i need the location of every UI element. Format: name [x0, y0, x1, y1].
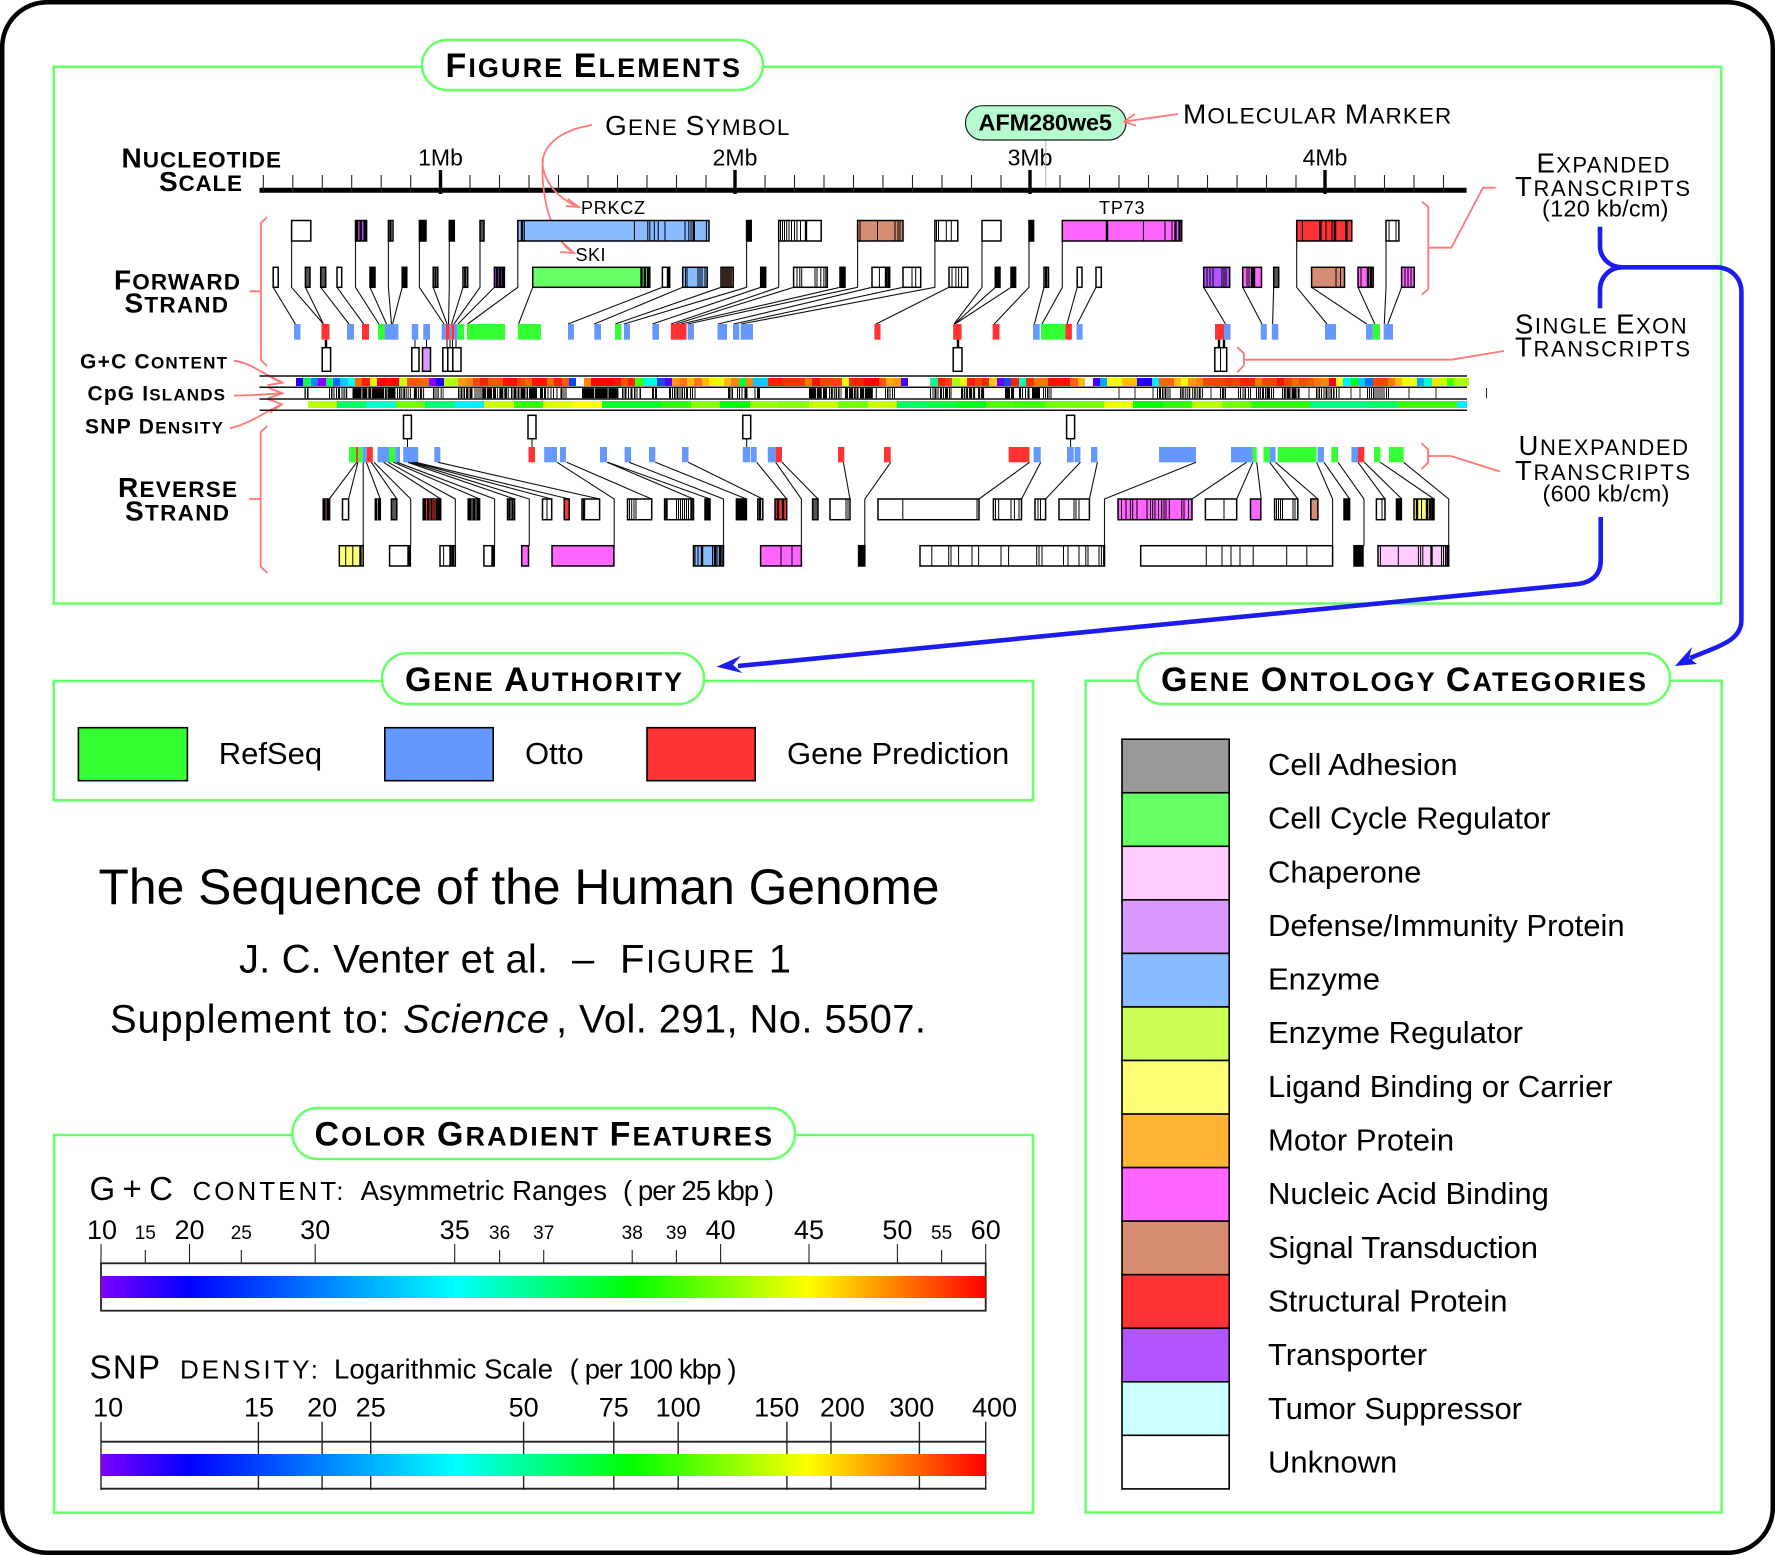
feature track labels: G+C CONTENT — [80, 350, 228, 373]
author line: J. C. Venter et al. — [239, 938, 548, 982]
gene symbol callout: SKI — [576, 245, 606, 265]
panel frame: gene authority — [54, 681, 1033, 800]
bracket: unexpanded transcripts — [1422, 443, 1500, 472]
legend: signal transduction — [1122, 1221, 1538, 1275]
nucleotide scale axis: 4Mb — [1303, 144, 1347, 170]
label: unexpanded transcripts: TRANSCRIPTS — [1515, 455, 1690, 486]
citation line: Supplement to: — [110, 998, 390, 1042]
heading pill: figure elements: FIGURE ELEMENTS — [446, 47, 740, 85]
chart: G+C gradient bar: 30 — [300, 1215, 330, 1245]
legend: ligand binding or carrier: Ligand Binding or Carrier — [1268, 1069, 1613, 1104]
legend: motor protein: Motor Protein — [1268, 1122, 1454, 1158]
forward transcripts: expanded row 1 — [292, 220, 1399, 241]
label: unexpanded transcripts: UNEXPANDED — [1518, 430, 1688, 461]
chart: G+C gradient bar: 10 — [87, 1215, 117, 1245]
legend: unknown: Unknown — [1268, 1444, 1397, 1479]
legend: defense/immunity protein — [1122, 900, 1625, 953]
title block — [98, 859, 940, 1042]
legend: transporter: Transporter — [1268, 1337, 1427, 1372]
heading: SNP density scale: Logarithmic Scale — [334, 1353, 553, 1384]
legend: enzyme regulator: Enzyme Regulator — [1268, 1015, 1523, 1050]
label: expanded transcripts: TRANSCRIPTS — [1515, 171, 1690, 202]
panel: gene authority — [54, 653, 1033, 800]
nucleotide scale axis: 2Mb — [713, 144, 757, 170]
chart: G+C gradient bar: 39 — [666, 1223, 687, 1244]
legend: Gene Prediction: Gene Prediction — [787, 736, 1009, 771]
chart: G+C gradient bar: 36 — [489, 1223, 510, 1244]
legend: tumor suppressor — [1122, 1382, 1522, 1435]
label: single exon transcripts — [1515, 308, 1690, 363]
label: single exon transcripts: TRANSCRIPTS — [1515, 332, 1690, 363]
forward strand label: STRAND — [124, 288, 228, 319]
author line: FIGURE 1 — [620, 938, 791, 982]
legend: cell adhesion — [1122, 739, 1458, 793]
chart: G+C gradient bar: 50 — [882, 1215, 912, 1245]
reverse strand label: REVERSE — [118, 472, 237, 503]
legend: chaperone — [1122, 846, 1421, 900]
legend: enzyme — [1122, 953, 1380, 1007]
feature track labels: SNP DENSITY — [85, 416, 224, 439]
forward strand connectors — [273, 241, 1402, 324]
chart: SNP gradient bar: 10 — [93, 1393, 123, 1423]
legend: RefSeq: RefSeq — [219, 736, 322, 771]
legend: cell cycle regulator — [1122, 793, 1551, 846]
legend: ligand binding or carrier — [1122, 1060, 1613, 1114]
legend: enzyme: Enzyme — [1268, 962, 1380, 997]
heading pill: color gradient features — [292, 1108, 795, 1159]
legend: structural protein — [1122, 1275, 1508, 1328]
chart: SNP gradient bar — [93, 1393, 1017, 1490]
chart: G+C gradient bar: 25 — [231, 1223, 252, 1244]
panel: gene ontology categories — [1086, 653, 1722, 1512]
arrow: expanded and single exon transcripts to gene ontology — [1600, 227, 1741, 666]
legend: Gene Prediction — [647, 728, 1009, 781]
G+C content track — [296, 378, 1469, 386]
chart: G+C gradient bar: 37 — [533, 1223, 554, 1244]
legend: structural protein: Structural Protein — [1268, 1284, 1508, 1318]
author line: – — [572, 938, 595, 982]
bracket: single exon to label — [1237, 347, 1504, 372]
chart: SNP gradient bar: 200 — [820, 1393, 865, 1423]
forward transcripts: expanded row 2 — [273, 267, 1414, 287]
legend: RefSeq — [78, 728, 322, 781]
heading pill: figure elements — [422, 40, 763, 90]
forward strand label: FORWARD — [114, 264, 240, 295]
single exon transcripts, reverse — [404, 415, 1075, 447]
reverse strand bracket — [249, 426, 268, 573]
label: unexpanded transcripts — [1515, 430, 1690, 506]
legend: enzyme regulator — [1122, 1007, 1523, 1060]
single exon transcripts, forward — [322, 340, 1227, 371]
arrow: unexpanded transcripts to gene authority — [716, 517, 1601, 673]
chart: SNP gradient bar: 100 — [656, 1393, 701, 1423]
label: expanded transcripts: (120 kb/cm) — [1542, 196, 1668, 222]
legend: transporter — [1122, 1328, 1427, 1382]
reverse transcripts: expanded row 2 — [339, 546, 1449, 566]
heading: G+C content scale: Asymmetric Ranges — [361, 1175, 607, 1206]
SNP density track — [308, 401, 1467, 408]
track rule lines — [260, 376, 1467, 410]
molecular marker callout: MOLECULAR MARKER — [1183, 98, 1451, 129]
chart: SNP gradient bar: 50 — [509, 1393, 539, 1423]
chart: G+C gradient bar: 20 — [174, 1215, 205, 1245]
legend: Otto: Otto — [525, 736, 584, 771]
nucleotide scale axis — [260, 144, 1467, 194]
citation line: Science — [403, 998, 549, 1042]
legend: cell adhesion: Cell Adhesion — [1268, 747, 1458, 782]
cpg islands track — [304, 388, 1052, 398]
legend: motor protein — [1122, 1114, 1454, 1168]
legend: nucleic acid binding — [1122, 1168, 1549, 1221]
forward strand bracket — [250, 217, 267, 366]
label: single exon transcripts: SINGLE EXON — [1515, 308, 1687, 339]
panel: figure elements — [54, 40, 1721, 604]
reverse strand connectors — [329, 462, 1449, 546]
reverse gene authority blocks — [349, 447, 1404, 462]
heading: G+C content scale: ( per 25 kbp ) — [623, 1175, 774, 1206]
heading: G+C content scale: CONTENT: — [192, 1176, 344, 1206]
feature track labels: CpG ISLANDS — [88, 383, 225, 406]
reverse strand label — [118, 472, 237, 527]
legend: nucleic acid binding: Nucleic Acid Binding — [1268, 1176, 1549, 1211]
panel frame: gene ontology categories — [1086, 681, 1722, 1512]
label: expanded transcripts: EXPANDED — [1536, 148, 1670, 179]
molecular marker callout: AFM280we5 — [978, 110, 1112, 136]
heading: SNP density scale — [90, 1348, 737, 1385]
panel frame: color gradient features — [54, 1135, 1033, 1513]
bracket: expanded transcripts — [1422, 188, 1496, 295]
chart: SNP gradient bar: 75 — [599, 1393, 629, 1423]
chart: G+C gradient bar: 55 — [931, 1223, 952, 1244]
legend: defense/immunity protein: Defense/Immunity Protein — [1268, 908, 1625, 943]
legend: cell cycle regulator: Cell Cycle Regulator — [1268, 801, 1551, 836]
heading: G+C content scale: G + C — [90, 1170, 173, 1207]
nucleotide scale axis: 3Mb — [1008, 144, 1052, 170]
heading: SNP density scale: ( per 100 kbp ) — [570, 1353, 737, 1384]
nucleotide scale label: NUCLEOTIDE — [122, 142, 281, 173]
legend: unknown — [1122, 1435, 1397, 1489]
reverse transcripts: expanded row 1 — [323, 499, 1434, 520]
chart: G+C gradient bar: 45 — [794, 1215, 824, 1245]
forward gene authority blocks — [294, 324, 1393, 340]
gene symbol callout: GENE SYMBOL — [605, 110, 789, 141]
chart: SNP gradient bar: 300 — [889, 1393, 934, 1423]
legend: chaperone: Chaperone — [1268, 854, 1421, 889]
heading pill: gene authority — [382, 653, 704, 704]
heading pill: gene authority: GENE AUTHORITY — [405, 661, 682, 699]
chart: G+C gradient bar: 35 — [440, 1215, 470, 1245]
pink arrows to feature tracks — [230, 361, 282, 428]
chart: SNP gradient bar: 150 — [754, 1393, 799, 1423]
chart: SNP gradient bar: 15 — [244, 1393, 274, 1423]
legend: signal transduction: Signal Transduction — [1268, 1230, 1538, 1265]
citation line — [110, 998, 926, 1042]
gene symbol callout: PRKCZ — [581, 198, 645, 218]
reverse strand label: STRAND — [125, 496, 229, 527]
forward strand label — [114, 264, 240, 319]
nucleotide scale label — [122, 142, 281, 197]
panel: color gradient features — [54, 1108, 1033, 1513]
panel frame: figure elements — [54, 67, 1721, 604]
thin cpg separators — [1119, 388, 1486, 398]
author line — [239, 938, 791, 982]
chart: SNP gradient bar: 25 — [356, 1393, 386, 1423]
heading pill: gene ontology categories — [1138, 653, 1670, 704]
heading pill: gene ontology categories: GENE ONTOLOGY CATEGORIES — [1161, 661, 1646, 699]
heading: SNP density scale: DENSITY: — [180, 1354, 318, 1384]
chart: G+C gradient bar: 60 — [971, 1215, 1001, 1245]
chart: SNP gradient bar: 20 — [307, 1393, 337, 1423]
gene symbol callout: TP73 — [1099, 198, 1144, 218]
chart: G+C gradient bar: 15 — [135, 1223, 156, 1244]
chart: G+C gradient bar: 38 — [622, 1223, 643, 1244]
label: unexpanded transcripts: (600 kb/cm) — [1542, 480, 1670, 506]
heading: SNP density scale: SNP — [90, 1348, 160, 1385]
chart: SNP gradient bar: 400 — [972, 1393, 1017, 1423]
heading: G+C content scale — [90, 1170, 774, 1207]
main title: The Sequence of the Human Genome — [98, 859, 940, 915]
chart: G+C gradient bar — [87, 1215, 1001, 1311]
chart: G+C gradient bar: 40 — [706, 1215, 736, 1245]
nucleotide scale label: SCALE — [159, 166, 242, 197]
gene symbol callout — [542, 110, 1144, 265]
feature track labels — [80, 350, 228, 439]
molecular marker callout — [966, 98, 1451, 187]
nucleotide scale axis: 1Mb — [418, 144, 463, 170]
legend: Otto — [385, 728, 584, 781]
label: expanded transcripts — [1515, 148, 1690, 222]
heading pill: color gradient features: COLOR GRADIENT FEATURES — [314, 1116, 772, 1154]
legend: tumor suppressor: Tumor Suppressor — [1268, 1391, 1522, 1426]
citation line: , Vol. 291, No. 5507. — [556, 998, 926, 1042]
